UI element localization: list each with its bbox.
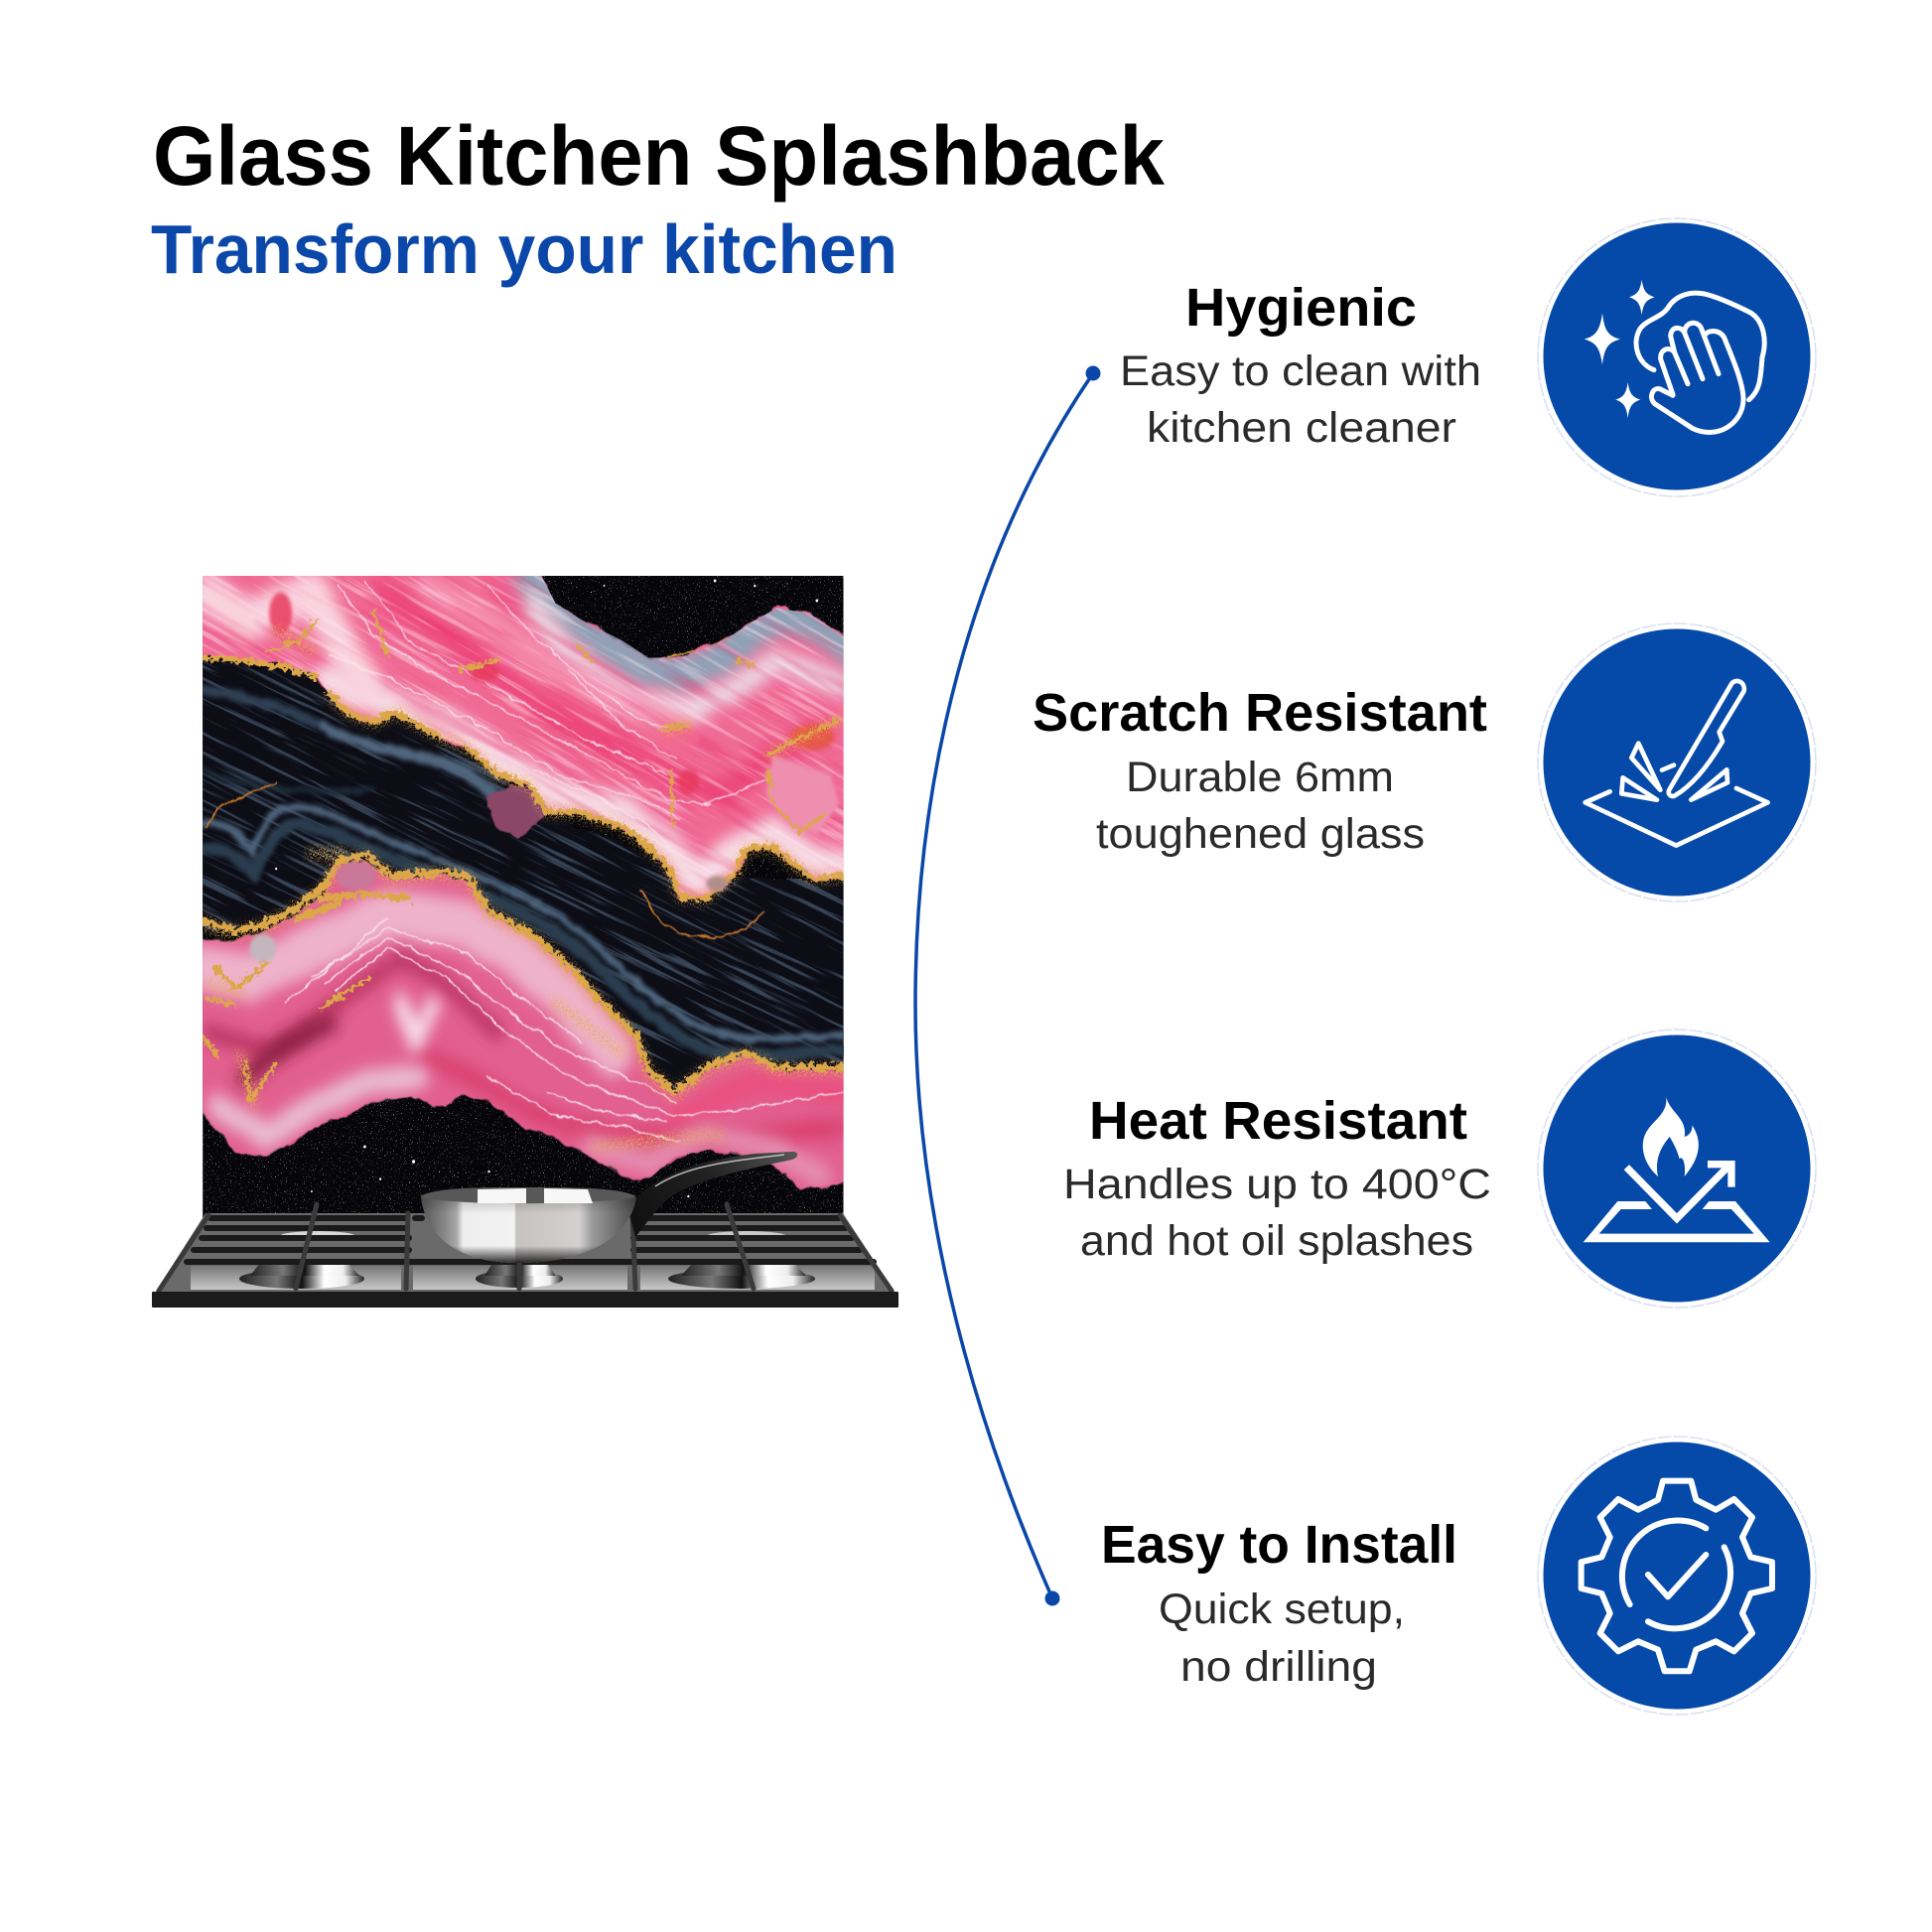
marble glass panel — [0, 110, 1149, 1581]
pan bowl — [421, 1197, 636, 1263]
icon: hand wiping with sparkles — [1538, 218, 1816, 496]
pan rim and interior — [420, 1187, 636, 1203]
description — [1063, 1161, 1491, 1265]
upper pink marble band — [203, 576, 844, 899]
thin orange veins — [205, 637, 763, 938]
pale V highlight — [400, 1003, 434, 1042]
description: Easy to clean with — [1120, 347, 1481, 395]
feature: Scratch Resistant — [1033, 623, 1816, 901]
white flow lines — [330, 581, 772, 854]
saturated cores — [378, 591, 821, 794]
grate bars — [159, 1204, 892, 1291]
feature: Heat Resistant — [1063, 1030, 1816, 1308]
description — [1120, 347, 1481, 452]
description: Quick setup, — [1159, 1586, 1405, 1633]
top-left pale area — [203, 591, 364, 685]
frying pan — [420, 1152, 797, 1263]
white strata — [285, 918, 844, 1142]
title: Glass Kitchen Splashback — [153, 109, 1165, 203]
steel burner trays — [191, 1266, 875, 1290]
product image: marble glass splashback above gas hob — [0, 110, 1149, 1581]
gold glitter halo — [203, 630, 844, 1147]
dark middle band — [188, 655, 861, 1097]
purple agate nub — [486, 782, 547, 839]
hob front edge — [152, 1292, 898, 1308]
description: and hot oil splashes — [1080, 1217, 1473, 1265]
pan handle — [627, 1152, 797, 1237]
description: no drilling — [1180, 1643, 1377, 1691]
deep magenta folds — [209, 958, 497, 1052]
feature: Easy to Install — [1101, 1437, 1816, 1715]
red glitter spots — [269, 592, 835, 794]
description: toughened glass — [1096, 810, 1425, 858]
gold veins — [197, 611, 844, 1102]
description — [1096, 754, 1425, 858]
pale lower-left area — [218, 1077, 418, 1137]
icon: flame reflecting off surface — [1538, 1030, 1816, 1308]
grey-blue rim — [529, 576, 853, 675]
description: kitchen cleaner — [1147, 404, 1456, 452]
hob — [152, 1204, 898, 1308]
description: Durable 6mm — [1126, 754, 1394, 801]
pale quartz pocket — [249, 934, 276, 962]
heading: Hygienic — [1185, 278, 1417, 338]
lower pink marble band — [188, 859, 861, 1189]
bright stars — [275, 580, 818, 1197]
description — [1159, 1586, 1405, 1691]
pale lower rim — [330, 680, 844, 884]
connector curve with end dots — [915, 365, 1100, 1606]
heading: Heat Resistant — [1089, 1091, 1467, 1151]
pink pocket — [336, 862, 376, 890]
burners — [239, 1231, 815, 1289]
icon: gear with check mark — [1538, 1437, 1816, 1715]
pink shield detail — [765, 755, 839, 834]
heading: Scratch Resistant — [1033, 683, 1487, 743]
feature: Hygienic — [1120, 218, 1816, 496]
lilac upper zone — [206, 913, 613, 1052]
heading: Easy to Install — [1101, 1515, 1457, 1575]
subtitle: Transform your kitchen — [151, 210, 897, 288]
description: Handles up to 400°C — [1063, 1161, 1491, 1208]
icon: knife scratching glass — [1538, 623, 1816, 901]
fine strata — [203, 576, 844, 897]
hob top — [154, 1213, 897, 1295]
